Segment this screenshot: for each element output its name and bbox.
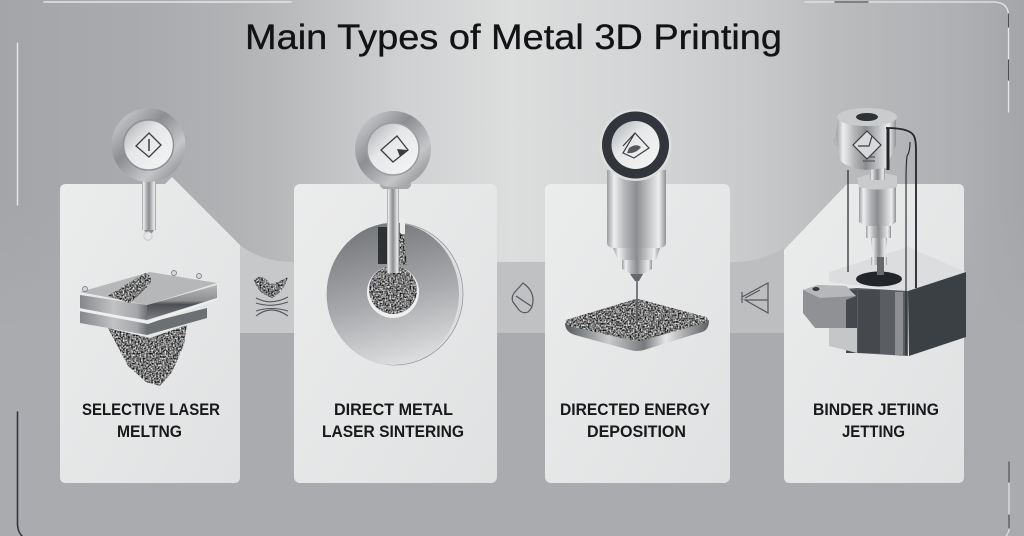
panel: binder jetting xyxy=(784,108,966,483)
label: LASER SINTERING xyxy=(322,423,464,441)
icon: leaf diamond connector xyxy=(512,283,533,313)
base block xyxy=(803,247,966,356)
title: Main Types of Metal 3D Printing xyxy=(245,18,782,57)
connector band 1 xyxy=(240,245,294,333)
label: MELTNG xyxy=(117,423,182,441)
connector band 3 xyxy=(730,248,784,333)
label: DIRECT METAL xyxy=(334,401,453,419)
panel: directed energy deposition xyxy=(545,109,730,483)
label: DEPOSITION xyxy=(587,423,686,441)
label xyxy=(82,401,220,441)
icon: laser head with stem xyxy=(112,108,186,240)
disc with powder well xyxy=(327,218,463,365)
panel: direct metal laser sintering xyxy=(294,111,497,483)
label: DIRECTED ENERGY xyxy=(560,401,710,419)
icon: print head xyxy=(833,108,897,275)
wires xyxy=(848,128,916,355)
panel: selective laser melting xyxy=(60,108,240,483)
laser beam xyxy=(636,281,638,325)
card background xyxy=(294,184,497,483)
label xyxy=(560,401,710,441)
label: SELECTIVE LASER xyxy=(82,401,220,419)
label: BINDER JETIING xyxy=(813,401,939,419)
label: JETTING xyxy=(842,423,905,441)
icon: deposition nozzle xyxy=(600,109,672,281)
icon: triangle connector xyxy=(742,283,768,313)
card background xyxy=(784,184,964,483)
build plate xyxy=(79,270,217,335)
icon: powder and curves connector xyxy=(254,277,288,316)
label xyxy=(322,401,464,441)
label xyxy=(813,401,939,441)
card background xyxy=(60,177,240,483)
build plate with powder xyxy=(565,299,709,351)
card background xyxy=(545,184,730,483)
powder cone xyxy=(108,325,187,386)
icon: laser head with stem xyxy=(355,111,431,273)
connector band 2 xyxy=(497,262,545,333)
